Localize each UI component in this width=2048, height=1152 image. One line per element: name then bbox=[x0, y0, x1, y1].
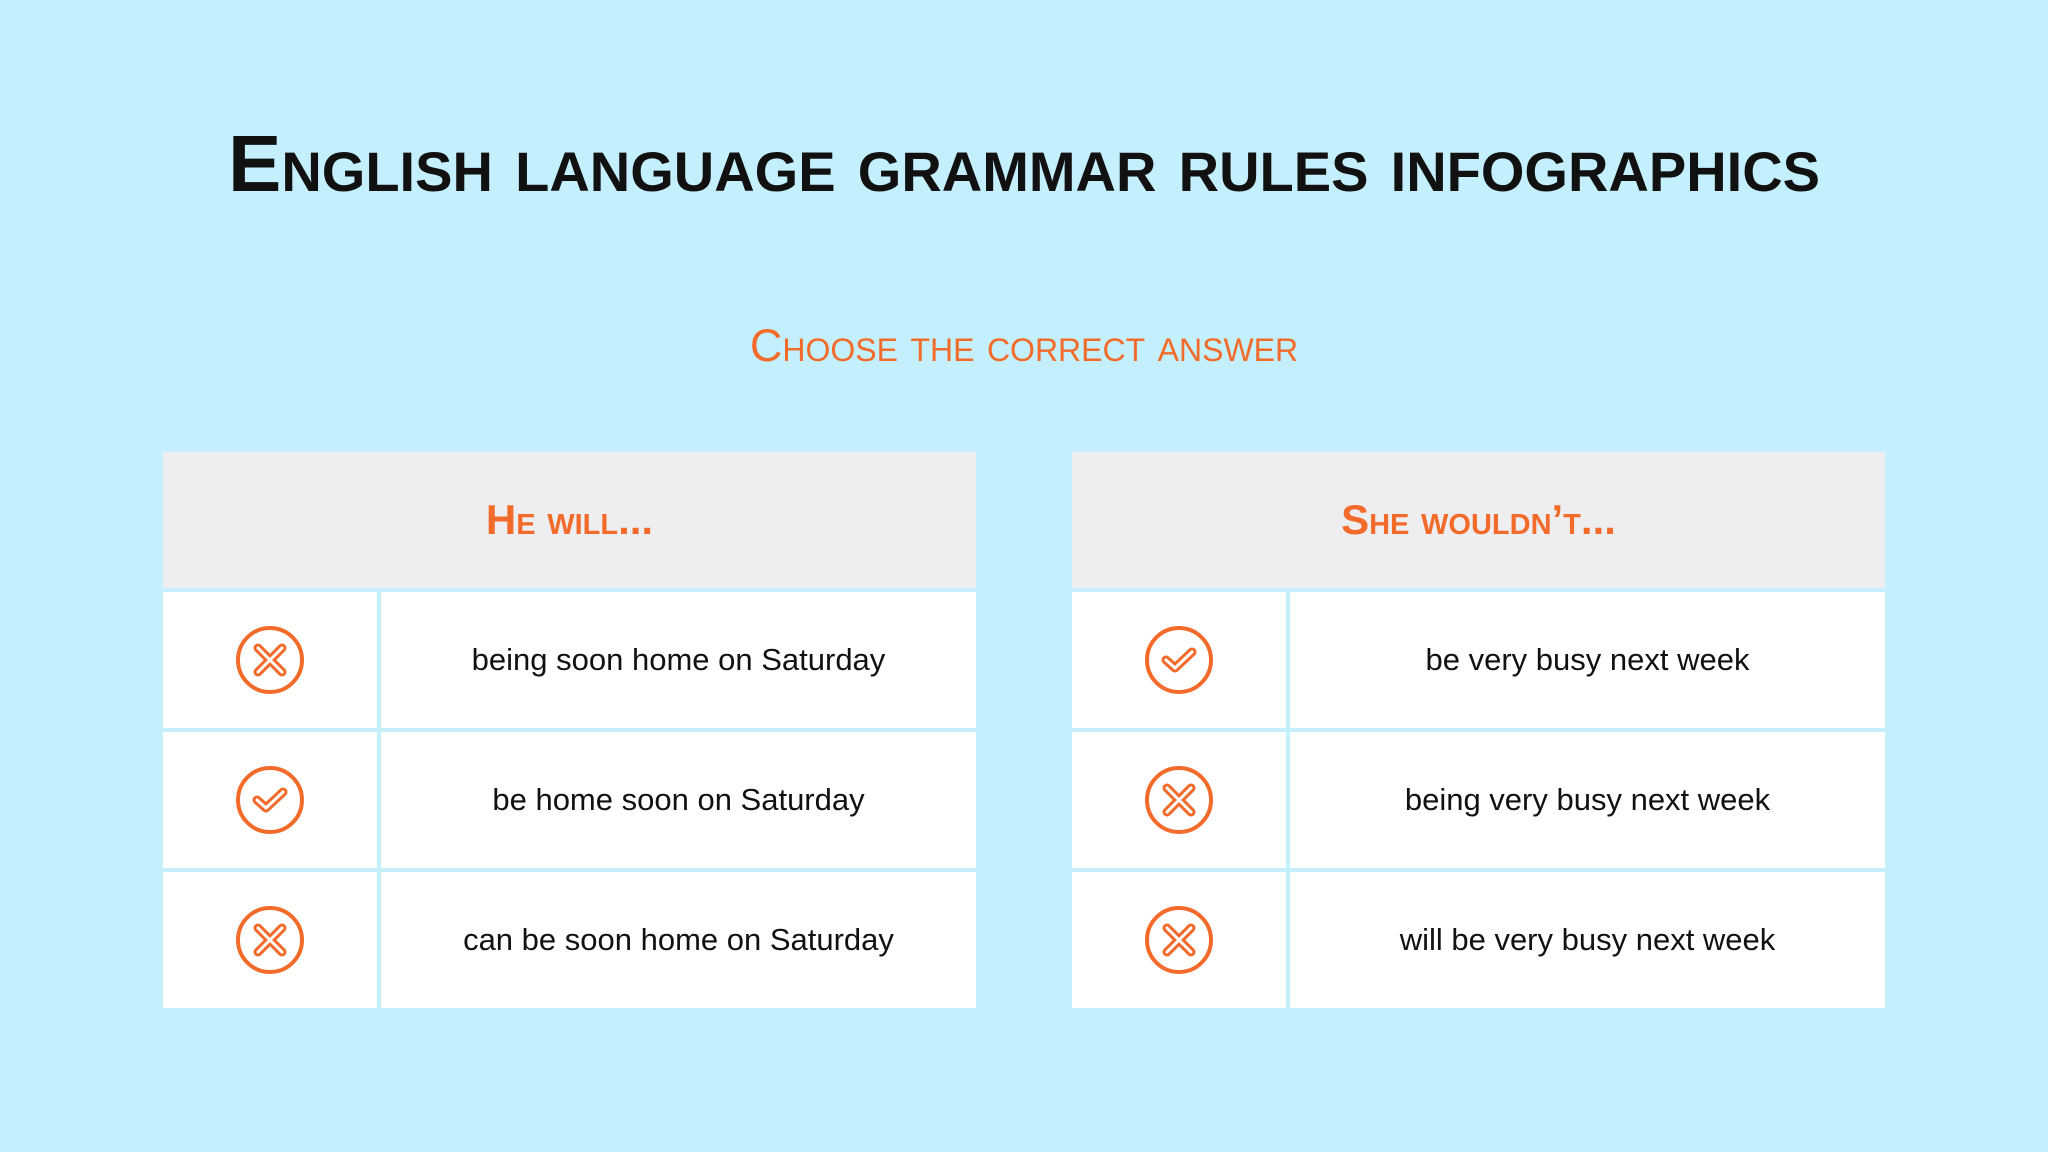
icon: cross bbox=[163, 872, 377, 1008]
header: she wouldn't bbox=[1072, 452, 1885, 588]
icon: cross bbox=[1072, 732, 1286, 868]
text: option 3: can be soon home on Saturday bbox=[463, 922, 894, 957]
subtitle: Choose the correct answer bbox=[750, 320, 1298, 371]
icon: cross bbox=[163, 592, 377, 728]
icon: check bbox=[1072, 592, 1286, 728]
header: he will bbox=[163, 452, 976, 588]
panel: he will bbox=[163, 452, 976, 1008]
panel: she wouldn't bbox=[1072, 452, 1885, 1008]
text: option 2 bbox=[381, 732, 976, 868]
icon: cross bbox=[1072, 872, 1286, 1008]
text: option 1 bbox=[1290, 592, 1885, 728]
text: option 2: be home soon on Saturday bbox=[492, 782, 865, 817]
text: option 3: will be very busy next week bbox=[1400, 922, 1775, 957]
icon: check bbox=[163, 732, 377, 868]
text: option 2 bbox=[1290, 732, 1885, 868]
text: option 3 bbox=[1290, 872, 1885, 1008]
text: option 1: be very busy next week bbox=[1426, 642, 1749, 677]
text: option 1: being soon home on Saturday bbox=[472, 642, 885, 677]
title: English language grammar rules infographics bbox=[228, 119, 1820, 208]
text: option 1 bbox=[381, 592, 976, 728]
text: option 2: being very busy next week bbox=[1405, 782, 1770, 817]
header: he will: He will... bbox=[486, 496, 653, 543]
header: she wouldn't: She wouldn’t... bbox=[1341, 496, 1616, 543]
text: option 3 bbox=[381, 872, 976, 1008]
